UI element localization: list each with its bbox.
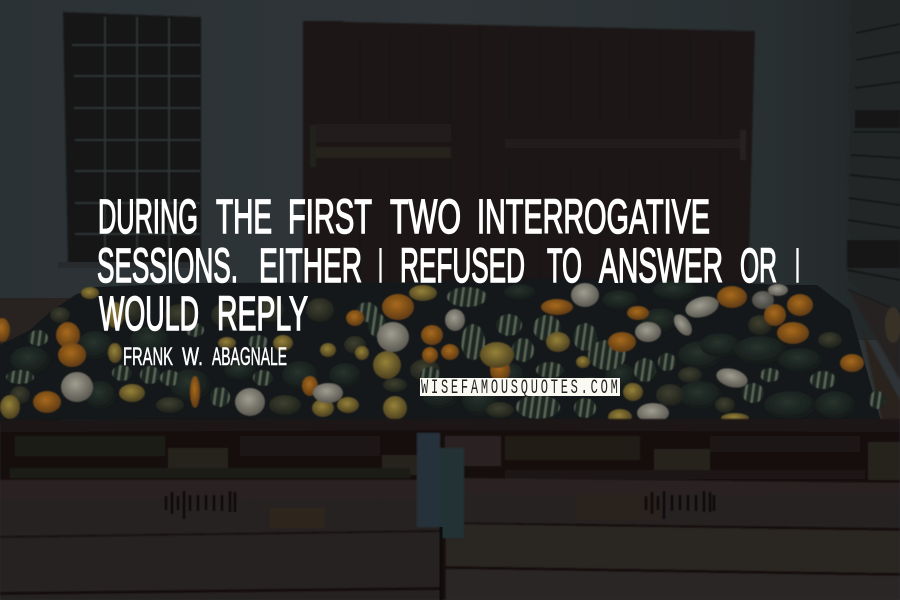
top rail — [0, 419, 900, 432]
quote line 3: WOULD — [99, 288, 199, 341]
quote line 2: TO — [547, 240, 582, 293]
cream gourds — [61, 283, 788, 423]
quote line 2: OR — [740, 240, 777, 293]
right planks — [446, 478, 900, 528]
quote line 2: SESSIONS. — [97, 240, 238, 293]
quote line 2: EITHER — [259, 240, 362, 293]
quote line 2: ANSWER — [599, 240, 723, 293]
striped gourds — [6, 287, 885, 419]
glass block window — [63, 12, 201, 265]
quote line 1: DURING — [98, 191, 198, 244]
text: I — [795, 240, 800, 293]
wooden crate — [0, 419, 900, 600]
dark filler gourds — [10, 280, 855, 419]
quote line 2: REFUSED — [400, 240, 525, 293]
wall base — [0, 298, 75, 345]
warm patches — [270, 508, 325, 528]
window sill — [58, 262, 206, 268]
quote line 3: REPLY — [217, 288, 308, 341]
gourd pile — [0, 278, 885, 425]
left planks — [0, 480, 440, 536]
metal bracket — [417, 433, 440, 527]
stamped marks — [166, 491, 235, 519]
pallet boards — [15, 436, 165, 456]
quote line 1: INTERROGATIVE — [477, 191, 710, 244]
quote line 2: I — [378, 240, 383, 293]
author attribution: FRANK — [123, 343, 173, 371]
watermark logo: WISEFAMOUSQUOTES.COM — [421, 376, 618, 399]
author attribution: W. — [182, 343, 203, 371]
author attribution — [123, 343, 287, 371]
yellow gourds — [0, 285, 749, 425]
wood slat wall on the right — [847, 0, 900, 420]
quote line 1: TWO — [390, 191, 461, 244]
author attribution: ABAGNALE — [212, 343, 287, 371]
quote text — [97, 191, 800, 341]
wooden door — [303, 21, 755, 301]
muted mid-tone gourds — [10, 298, 842, 418]
quote line 1: FIRST — [288, 191, 372, 244]
door rails — [316, 124, 451, 142]
quote line 1: THE — [216, 191, 272, 244]
quote line 1 — [98, 191, 710, 244]
wall — [0, 0, 900, 340]
quote line 2 — [97, 240, 800, 293]
orange gourds — [0, 286, 864, 413]
